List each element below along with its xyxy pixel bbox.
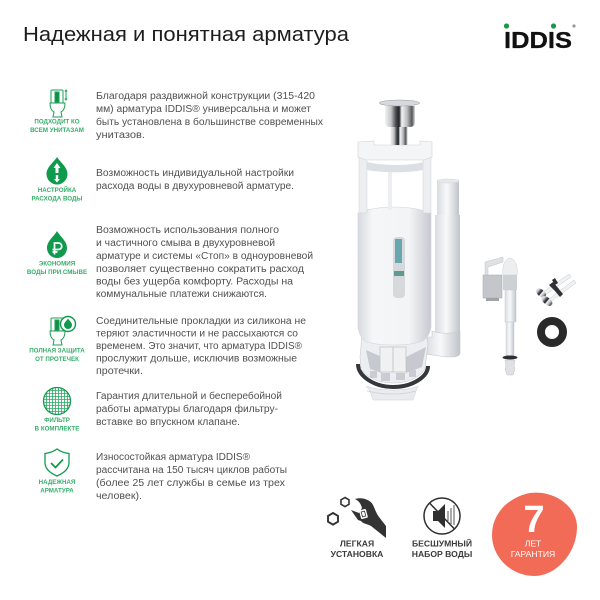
badge: 7 year warranty: 7	[523, 499, 545, 541]
icon: wrench and nuts	[328, 498, 386, 538]
feature: easy installation	[328, 498, 386, 559]
label: flow setting	[32, 186, 82, 202]
threaded base	[366, 386, 418, 400]
label: filter included	[35, 417, 79, 432]
text block: silicone gaskets: Соединительные прокладки из силикона не	[96, 316, 306, 327]
label: easy installation: УСТАНОВКА	[331, 549, 383, 559]
text block: telescopic design: унитазов.	[96, 130, 145, 141]
label: leak protection: ОТ ПРОТЕЧЕК	[35, 356, 79, 363]
text block: telescopic design: быть установлена в большинстве современных	[96, 116, 323, 128]
panel: universal fit	[30, 90, 323, 141]
text block: silicone gaskets: прослужит дольше, исключив возможные	[96, 354, 297, 364]
text block: silicone gaskets: протечки.	[96, 366, 143, 377]
text block: full and partial flush: и частичного смыва в двухуровневой	[96, 238, 275, 249]
text block: durability: Износостойкая арматура IDDIS®	[96, 452, 251, 463]
text block: durability	[96, 452, 287, 502]
panel: leak protection	[29, 316, 306, 377]
top bracket	[358, 141, 432, 160]
text block: filter insert: работы арматуры благодаря фильтру-	[96, 403, 278, 415]
label: saving	[27, 260, 87, 276]
feature: silent filling	[412, 498, 472, 559]
icon: mesh filter	[43, 387, 71, 415]
product: black sealing ring	[541, 321, 563, 343]
product: mounting screws	[534, 274, 576, 308]
label: easy installation	[331, 538, 383, 559]
label: easy installation: ЛЕГКАЯ	[340, 538, 374, 548]
badge: 7 year warranty	[492, 493, 577, 576]
text block: silicone gaskets: временем. Это значит, что арматура IDDIS®	[96, 341, 303, 352]
label: flow setting: НАСТРОЙКА	[38, 186, 77, 194]
icon: water drop with arrows	[46, 157, 68, 184]
lower cage	[360, 335, 428, 383]
panel: filter	[35, 387, 282, 432]
panel: flow adjustment	[32, 157, 294, 202]
text block: individual setting: Возможность индивидуальной настройки	[96, 168, 294, 179]
text block: durability: (более 25 лет службы в семье из трех	[96, 477, 285, 489]
main body	[358, 207, 431, 345]
water level window	[393, 237, 405, 298]
text block: individual setting	[96, 168, 294, 192]
label: fits all toilets	[30, 118, 84, 134]
label: flow setting: РАСХОДА ВОДЫ	[32, 196, 82, 202]
label: reliable fittings	[39, 479, 76, 494]
product: fill valve	[483, 257, 518, 375]
text block: full and partial flush: Возможность использования полного	[96, 225, 279, 236]
label: filter included: ФИЛЬТР	[44, 417, 70, 424]
text block: filter insert: Гарантия длительной и бесперебойной	[96, 390, 282, 402]
text block: full and partial flush: коммунальные платежи снижаются.	[96, 289, 267, 300]
text block: filter insert	[96, 390, 282, 428]
text block: individual setting: расхода воды в двухуровневой арматуре.	[96, 181, 294, 192]
icon: muted speaker	[424, 498, 460, 534]
product: flush valve	[358, 100, 460, 400]
label: fits all toilets: ВСЕМ УНИТАЗАМ	[30, 127, 84, 134]
text block: telescopic design: мм) арматура IDDIS® универсальна и может	[96, 104, 311, 115]
text block: durability: рассчитана на 150 тысяч циклов работы	[96, 464, 287, 476]
label: leak protection	[29, 348, 85, 363]
title: Надежная и понятная арматура	[23, 23, 350, 46]
text block: telescopic design: Благодаря раздвижной конструкции (315-420	[96, 91, 315, 102]
label: saving: ВОДЫ ПРИ СМЫВЕ	[27, 269, 87, 276]
text block: full and partial flush: арматуре и системы «Стоп» в одноуровневой	[96, 251, 313, 262]
chrome push button	[380, 100, 420, 145]
badge: 7 year warranty: ГАРАНТИЯ	[511, 549, 555, 559]
icon: shield with check	[45, 449, 69, 476]
text block: full and partial flush: воды без ущерба комфорту. Расходы на	[96, 276, 293, 288]
label: saving: ЭКОНОМИЯ	[39, 260, 76, 268]
label: fits all toilets: ПОДХОДИТ КО	[34, 118, 80, 126]
panel: water saving	[27, 225, 313, 300]
badge: 7 year warranty: ЛЕТ	[525, 538, 542, 548]
text block: silicone gaskets: теряют эластичности и не рассыхаются со	[96, 328, 298, 340]
side overflow tube	[425, 179, 460, 357]
label: reliable fittings: НАДЕЖНАЯ	[39, 479, 76, 486]
text block: telescopic design	[96, 91, 323, 141]
icon: toilet with height arrow	[50, 90, 67, 117]
text block: silicone gaskets	[96, 316, 306, 377]
label: silent filling	[412, 538, 472, 559]
label: reliable fittings: АРМАТУРА	[40, 488, 74, 494]
text block: durability: человек).	[96, 491, 142, 502]
label: silent filling: НАБОР ВОДЫ	[412, 549, 472, 559]
text block: full and partial flush	[96, 225, 313, 300]
black gasket	[358, 364, 428, 387]
label: filter included: В КОМПЛЕКТЕ	[35, 426, 79, 432]
frame legs and window	[359, 157, 431, 213]
text block: filter insert: вставке во впускном клапане.	[96, 417, 240, 428]
panel: reliability	[39, 449, 287, 502]
logo: IDDIS: IDDIS	[504, 27, 572, 53]
icon: toilet with drop badge	[50, 316, 76, 345]
text block: full and partial flush: позволяет существенно сократить расход	[96, 264, 304, 275]
label: leak protection: ПОЛНАЯ ЗАЩИТА	[29, 348, 85, 354]
label: silent filling: БЕСШУМНЫЙ	[412, 538, 472, 548]
icon: water drop with ruble	[47, 231, 67, 258]
